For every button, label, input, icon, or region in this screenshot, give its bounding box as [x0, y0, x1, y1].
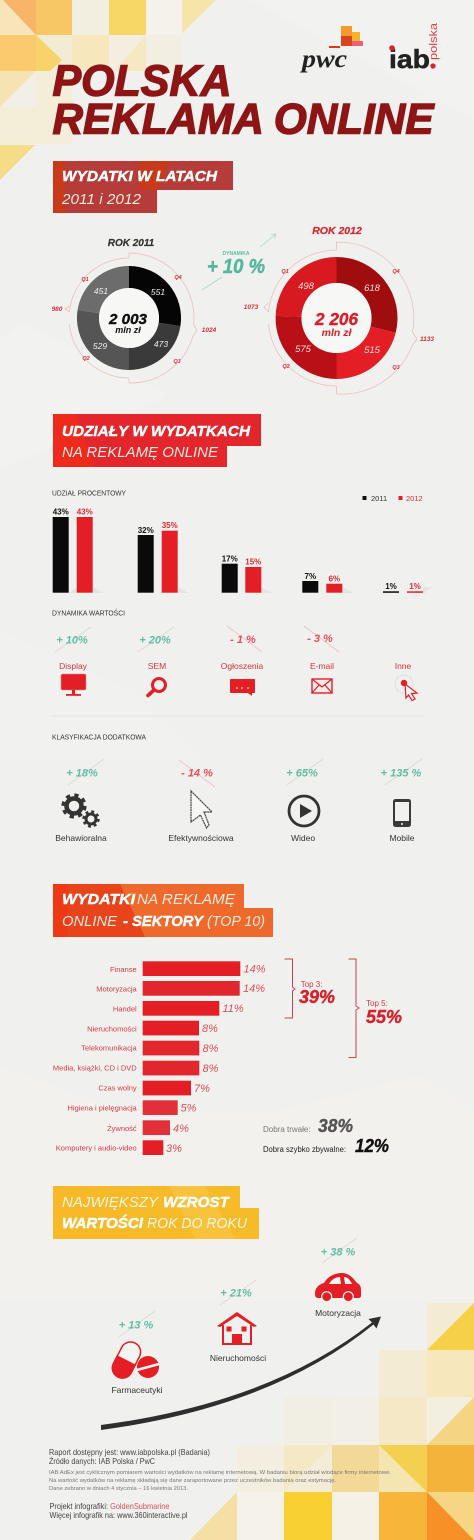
bar chart: sektory top 10: 3%	[166, 1143, 182, 1155]
logo: iab polska: iab	[389, 44, 430, 74]
bar chart: sektory top 10: 14%	[244, 964, 266, 976]
footer: sources	[49, 1447, 391, 1492]
category: Inne	[395, 661, 417, 700]
classification values: + 65%	[286, 768, 318, 780]
category: Display: Display	[59, 661, 88, 671]
chart: donut 2011: 980	[52, 306, 63, 313]
bar chart: sektory top 10: 14%	[243, 983, 265, 995]
chart: donut 2012: Q2	[282, 364, 290, 370]
callout: top 5: 55%	[366, 1007, 402, 1027]
chart: donut 2011: 451	[94, 286, 108, 296]
bar chart: sektory top 10: Finanse	[110, 965, 137, 974]
growth: Motoryzacja: Motoryzacja	[315, 1308, 361, 1318]
top-left tiles	[0, 0, 36, 35]
logo: iab polska: polska	[428, 22, 440, 60]
icon: gears Behawioralna: Behawioralna	[55, 833, 107, 843]
chart: donut 2012: 1073	[244, 304, 259, 311]
chart: donut 2011: Q4	[174, 275, 182, 281]
bar chart: udział procentowy: 35%	[162, 521, 178, 530]
chart: donut 2011: Q2	[82, 356, 90, 362]
bar chart: udział procentowy: 7%	[305, 572, 316, 581]
footer: credits: Projekt infografiki: GoldenSubmarine	[50, 1501, 170, 1511]
icon: gears Behawioralna	[55, 795, 107, 843]
arrow: growth curve	[101, 1316, 381, 1430]
heading: największy wzrost: ROK DO ROKU	[147, 1215, 247, 1232]
chart: donut 2012: 498	[298, 281, 315, 292]
heading: wydatki sektory: SEKTORY	[132, 913, 205, 930]
category: E-mail	[310, 661, 334, 693]
callout: top 3: 39%	[299, 987, 335, 1007]
footer: sources: Dane zebrano w dniach 4 stycznia – 16 kwietnia 2013.	[49, 1486, 188, 1492]
category: Display	[59, 661, 88, 696]
bar chart: udział procentowy: 43%	[53, 508, 69, 516]
bar chart: udział procentowy: 1%	[385, 582, 397, 591]
bar chart: sektory top 10: Handel	[113, 1004, 137, 1014]
bar chart: sektory top 10: 8%	[202, 1023, 218, 1035]
callout: dynamika +10%: + 10 %	[207, 256, 265, 278]
icon: cursor Efektywnościowa	[168, 791, 234, 843]
heading: wydatki w latach: 2011 i 2012	[61, 191, 142, 208]
bar chart: sektory top 10: Czas wolny	[98, 1084, 137, 1092]
bar chart: udział procentowy: 1%	[409, 582, 421, 591]
callout: top 3: Top 3:	[301, 980, 322, 989]
callout: top 5: Top 5:	[366, 999, 388, 1008]
heading: największy wzrost: WARTOŚCI	[62, 1214, 144, 1232]
icon: play Wideo: Wideo	[291, 833, 315, 843]
dynamics values	[55, 626, 339, 652]
footer: sources: Źródło danych: IAB Polska / PwC	[49, 1456, 155, 1466]
chart: donut 2011: 2 003	[108, 311, 148, 328]
bar chart: udział procentowy: 2012	[406, 494, 423, 503]
callout: dobra szybko zbywalne: Dobra szybko zbywalne:	[263, 1145, 346, 1154]
category: SEM: SEM	[148, 661, 166, 671]
bar chart: sektory top 10: Nieruchomości	[87, 1024, 137, 1034]
heading: wydatki sektory: ONLINE	[62, 913, 118, 930]
bar chart: sektory top 10: Żywność	[107, 1124, 137, 1133]
heading: wydatki sektory: (TOP 10)	[207, 913, 265, 930]
footer: sources: Raport dostępny jest: www.iabpolska.pl (Badania)	[49, 1447, 210, 1457]
category: Ogłoszenia	[221, 661, 264, 696]
dynamics values: - 3 %	[307, 633, 333, 645]
bar chart: sektory top 10: 5%	[180, 1102, 197, 1114]
bar chart: udział procentowy: UDZIAŁ PROCENTOWY	[52, 490, 126, 498]
bottom-right tiles	[427, 1303, 474, 1350]
callout: dobra trwałe: Dobra trwałe:	[263, 1125, 311, 1134]
chart: donut 2012: 575	[295, 344, 312, 355]
chart: donut 2011: Q1	[81, 277, 89, 283]
chart: donut 2012: 2 206	[314, 309, 358, 329]
growth: Farmaceutyki: Farmaceutyki	[111, 1385, 163, 1395]
bar chart: udział procentowy: 43%	[77, 508, 93, 516]
bar chart: sektory top 10: Komputery i audio-video	[56, 1144, 137, 1152]
chart: donut 2012: Q3	[392, 365, 400, 371]
bar chart: sektory top 10: Motoryzacja	[96, 984, 138, 994]
growth: Motoryzacja: + 38 %	[321, 1246, 355, 1258]
callout: top 3	[284, 959, 335, 1018]
title: REKLAMA ONLINE	[52, 96, 435, 144]
bar chart: sektory top 10: 7%	[194, 1083, 210, 1095]
heading: udziały w wydatkach: UDZIAŁY W WYDATKACH	[62, 423, 251, 440]
classification values: - 14 %	[181, 768, 213, 780]
classification values: + 18%	[66, 768, 98, 780]
bar chart: sektory top 10: 11%	[222, 1003, 244, 1015]
bar chart: sektory top 10: Higiena i pielęgnacja	[67, 1104, 138, 1112]
bar chart: sektory top 10: 8%	[202, 1063, 219, 1075]
chart: donut 2011: mln zł	[115, 325, 141, 335]
heading: wydatki sektory: WYDATKI	[62, 891, 136, 908]
chart: donut 2012: 618	[364, 283, 381, 294]
chart: donut 2011: Q3	[173, 359, 181, 365]
logo: iab polska	[389, 22, 440, 74]
title: POLSKA	[52, 56, 232, 106]
bar chart: sektory top 10: Telekomunikacja	[81, 1044, 138, 1052]
bar chart: sektory top 10: 8%	[202, 1043, 219, 1055]
bar chart: udział procentowy: 17%	[222, 554, 238, 564]
classification values: + 135 %	[381, 768, 422, 780]
bar chart: sektory top 10: 4%	[173, 1123, 189, 1135]
heading: wydatki sektory	[53, 884, 273, 937]
heading: wydatki sektory: NA REKLAMĘ	[137, 891, 236, 908]
heading: udziały w wydatkach: NA REKLAMĘ ONLINE	[62, 444, 219, 461]
category: E-mail: E-mail	[310, 661, 334, 671]
logo: pwc	[300, 26, 363, 73]
heading: największy wzrost	[53, 1186, 259, 1239]
chart: donut 2012: Q1	[281, 269, 289, 275]
growth: Nieruchomości	[210, 1280, 266, 1363]
bar chart: udział procentowy: 6%	[329, 574, 340, 584]
chart: donut 2012: ROK 2012	[312, 225, 362, 237]
label: dynamika wartości: DYNAMIKA WARTOŚCI	[52, 608, 125, 618]
chart: donut 2012: 1133	[420, 336, 434, 343]
chart: donut 2011	[52, 238, 217, 383]
growth: Farmaceutyki	[108, 1311, 163, 1395]
category: SEM	[148, 661, 166, 696]
bar chart: udział procentowy: 2011	[371, 494, 387, 503]
bar chart: sektory top 10	[53, 961, 266, 1155]
bar chart: udział procentowy: 15%	[245, 558, 261, 566]
chart: donut 2011: 551	[151, 287, 165, 297]
classification values	[66, 759, 422, 787]
heading: wydatki w latach: WYDATKI W LATACH	[62, 168, 218, 185]
dynamics values: - 1 %	[230, 634, 256, 646]
chart: donut 2012	[244, 225, 434, 394]
callout: dobra szybko zbywalne: 12%	[355, 1136, 389, 1156]
callout: dynamika +10%	[202, 234, 276, 290]
category: Ogłoszenia: Ogłoszenia	[221, 661, 264, 671]
dynamics values: + 20%	[139, 634, 171, 646]
icon: phone Mobile	[389, 799, 415, 843]
chart: donut 2011: ROK 2011	[108, 238, 155, 249]
callout: dynamika +10%: DYNAMIKA	[223, 251, 250, 257]
chart: donut 2011: 473	[154, 339, 168, 349]
callout: top 5	[348, 959, 402, 1058]
heading: największy wzrost: NAJWIĘKSZY	[62, 1194, 159, 1211]
icon: play Wideo	[289, 796, 319, 843]
chart: donut 2011: 1024	[202, 327, 217, 334]
chart: donut 2012: mln zł	[322, 327, 352, 339]
callout: dobra trwałe: 38%	[318, 1116, 353, 1136]
bar chart: sektory top 10: Media, książki, CD i DVD	[53, 1064, 137, 1072]
logo: pwc: pwc	[300, 46, 347, 73]
dynamics values: + 10%	[56, 634, 88, 646]
category: Inne: Inne	[395, 661, 412, 671]
growth: Farmaceutyki: + 13 %	[119, 1320, 153, 1332]
footer: credits	[50, 1501, 188, 1520]
growth: Nieruchomości: Nieruchomości	[210, 1353, 266, 1363]
callout: dobra szybko zbywalne	[263, 1136, 389, 1156]
footer: sources: Na wartość wydatków na reklamę składają się dane zaraportowane przez uczestników badania oraz estymację.	[49, 1478, 336, 1484]
heading: udziały w wydatkach	[53, 414, 261, 467]
chart: donut 2012: Q4	[392, 269, 400, 275]
title	[52, 56, 435, 144]
footer: sources: IAB AdEx jest cyklicznym pomiarem wartości wydatków na reklamę internetową. W badaniu biorą udział wiodące firmy internetowe.	[49, 1470, 391, 1476]
icon: phone Mobile: Mobile	[389, 833, 415, 843]
heading: wydatki w latach	[53, 161, 233, 213]
heading: największy wzrost: WZROST	[163, 1194, 231, 1211]
bar chart: udział procentowy: 32%	[138, 526, 154, 535]
growth: Motoryzacja	[315, 1238, 361, 1318]
icon: cursor Efektywnościowa: Efektywnościowa	[168, 833, 234, 843]
label: klasyfikacja dodatkowa: KLASYFIKACJA DODATKOWA	[52, 734, 146, 742]
footer: credits: Więcej infografik na: www.360interactive.pl	[50, 1510, 188, 1520]
bar chart: udział procentowy	[52, 490, 433, 593]
growth: Nieruchomości: + 21%	[220, 1288, 252, 1300]
callout: dobra trwałe	[263, 1116, 353, 1136]
heading: wydatki sektory: -	[123, 913, 128, 930]
chart: donut 2012: 515	[364, 345, 381, 356]
chart: donut 2011: 529	[93, 341, 107, 351]
